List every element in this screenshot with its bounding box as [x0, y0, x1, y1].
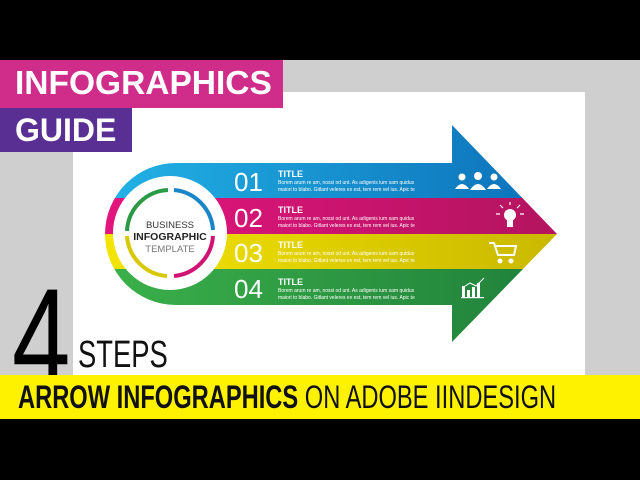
icon: bulb [496, 202, 524, 227]
step rows: Borem arum re am, nossi od unt. As adigenis ium sam quidus [278, 216, 415, 222]
steps label: STEPS [78, 334, 168, 376]
icon: chart [461, 278, 484, 298]
step rows: Borem arum re am, nossi od unt. As adigenis ium sam quidus [278, 251, 415, 257]
heading: guide: GUIDE [15, 112, 116, 148]
yellow bottom banner [0, 375, 640, 419]
step rows: Borem arum re am, nossi od unt. As adigenis ium sam quidus [278, 288, 415, 294]
arrow infographic [105, 125, 557, 342]
center circle: INFOGRAPHIC [133, 231, 207, 243]
gray background [0, 60, 640, 376]
step rows [234, 167, 415, 304]
yellow bottom banner: ARROW INFOGRAPHICS ON ADOBE IINDESIGN [18, 379, 556, 415]
step rows: TITLE [278, 277, 303, 287]
step rows: maiori to blabo. Gitlant veleres ex est, tem rem vel ius. Apic te [278, 258, 415, 264]
white card [73, 92, 585, 376]
heading: infographics [0, 60, 283, 108]
step rows: 04 [234, 274, 263, 304]
step rows: TITLE [278, 169, 303, 179]
step rows: TITLE [278, 205, 303, 215]
step rows: maiori to blabo. Gitlant veleres ex est, tem rem vel ius. Apic te [278, 187, 415, 193]
step rows: 03 [234, 238, 263, 268]
center circle: TEMPLATE [145, 244, 195, 255]
step rows: 02 [234, 203, 263, 233]
heading: guide [0, 108, 132, 152]
heading: infographics: INFOGRAPHICS [15, 65, 272, 102]
icon: cart [489, 243, 516, 262]
icon: people [455, 172, 501, 190]
center circle: BUSINESS [146, 220, 194, 231]
big number 4: 4 [12, 259, 70, 416]
step rows: TITLE [278, 240, 303, 250]
step rows: maiori to blabo. Gitlant veleres ex est, tem rem vel ius. Apic te [278, 295, 415, 301]
step rows: maiori to blabo. Gitlant veleres ex est, tem rem vel ius. Apic te [278, 223, 415, 229]
step rows: Borem arum re am, nossi od unt. As adigenis ium sam quidus [278, 180, 415, 186]
step rows: 01 [234, 167, 263, 197]
center circle [113, 176, 227, 290]
